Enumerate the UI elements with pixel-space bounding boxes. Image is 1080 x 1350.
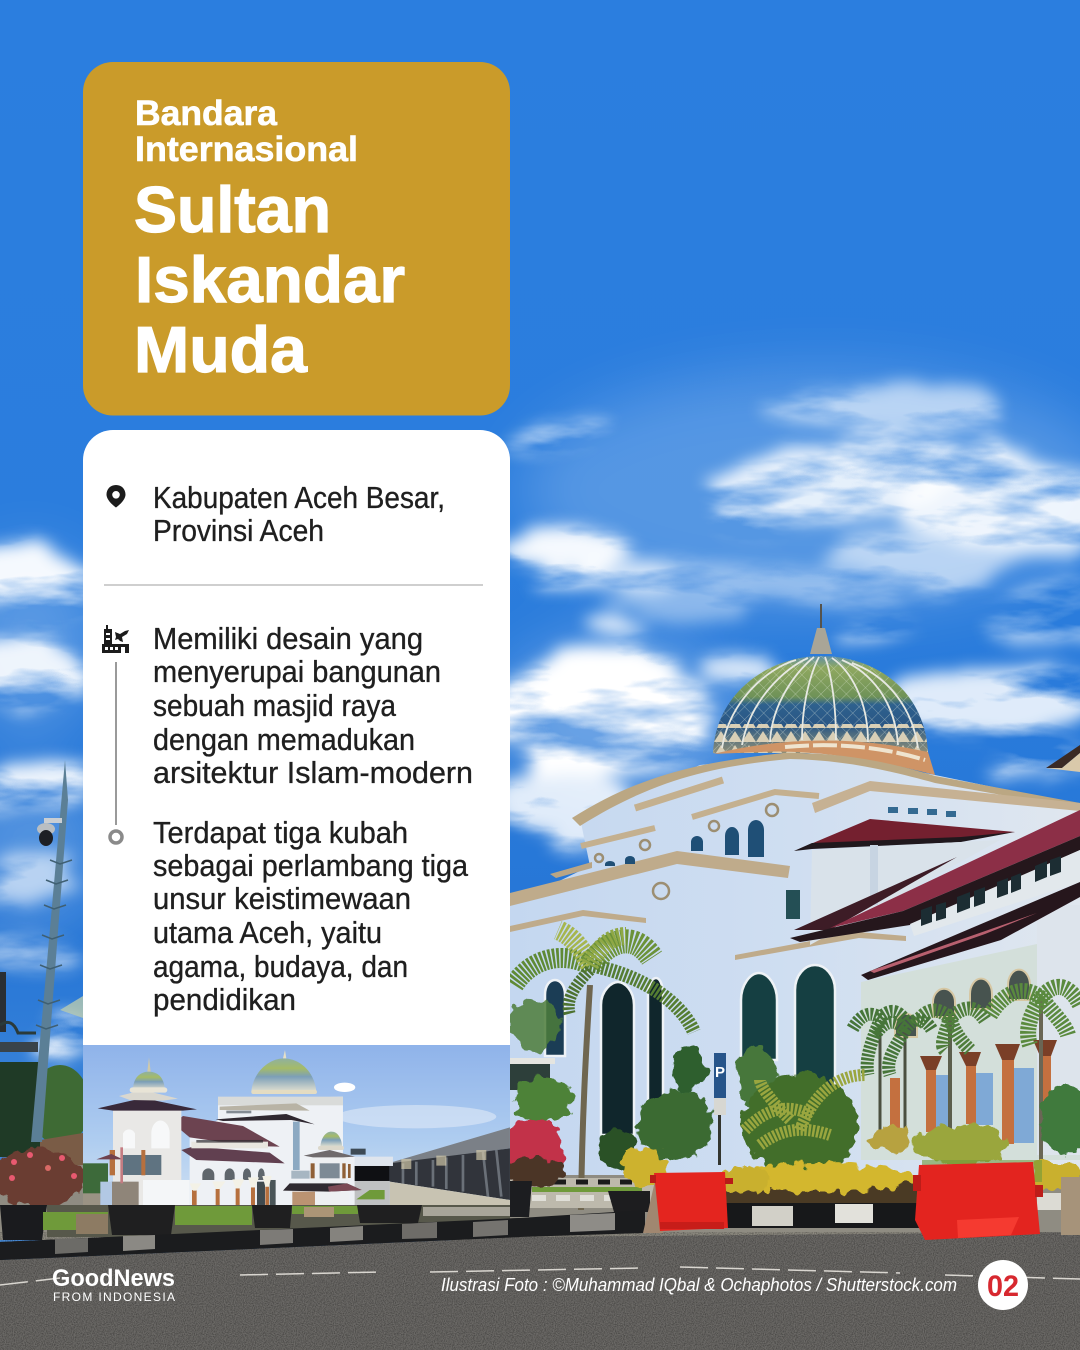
dome [705, 604, 935, 775]
red flower bush [501, 1118, 565, 1182]
text: dome fact [153, 815, 469, 1017]
columns [890, 1040, 1057, 1144]
palms and garden plants [493, 930, 1080, 1217]
text: location: Kabupaten Aceh Besar, [153, 480, 445, 515]
inset clouds [336, 1105, 496, 1128]
page number badge: 02 [987, 1270, 1019, 1303]
main red roof [794, 857, 957, 930]
inset main wall [190, 1097, 355, 1207]
inset large maroon roof [173, 1116, 280, 1147]
text: dome fact: Terdapat tiga kubah [153, 815, 408, 850]
ground behind garden [0, 1160, 1080, 1240]
text: design fact: dengan memadukan [153, 722, 415, 757]
main wall mass [510, 752, 1080, 1175]
logo: GoodNews From Indonesia [52, 1265, 175, 1304]
concrete block [1061, 1177, 1080, 1235]
yellow pot [623, 1148, 667, 1186]
clouds [0, 377, 1080, 1066]
red barrier right [913, 1162, 1043, 1240]
red barrier left [650, 1172, 733, 1231]
inset canopy [283, 1183, 362, 1192]
divider [104, 584, 483, 586]
title: airport name [134, 173, 405, 386]
panel: details card [83, 430, 510, 1046]
large arched windows [545, 965, 835, 1135]
connector node [110, 831, 122, 843]
lower red roof [861, 882, 1080, 980]
terminal building: P [715, 1064, 725, 1081]
main palm [514, 930, 694, 1210]
left flower planter [0, 1148, 84, 1240]
title: small lines: Bandara [135, 94, 278, 133]
top cornice [572, 753, 1080, 826]
text: dome fact: agama, budaya, dan [153, 949, 408, 984]
shrubs [509, 1000, 1080, 1177]
text: dome fact: pendidikan [153, 982, 296, 1017]
inset left tower [113, 1108, 181, 1205]
wing arches [895, 970, 1030, 1037]
text: location: Provinsi Aceh [153, 513, 324, 548]
far right roof corner [1046, 745, 1080, 768]
window strip [910, 850, 1080, 936]
inset trees [83, 1163, 108, 1197]
inset connector [350, 1157, 393, 1166]
inset photo: airport exterior [83, 1045, 510, 1207]
road [0, 1232, 1080, 1350]
inset main dome [251, 1058, 316, 1092]
terminal building [510, 604, 1080, 1175]
curb [0, 1193, 1061, 1260]
left lamp pole and camera [0, 760, 72, 1142]
upper ledges [635, 780, 723, 808]
wall under upper roof [810, 840, 1000, 945]
inset upper roof [216, 1114, 315, 1124]
logo: GoodNews From Indonesia: FROM INDONESIA [53, 1290, 175, 1304]
upper arched windows [605, 820, 800, 919]
text: location [153, 480, 445, 548]
inset arches [202, 1168, 276, 1205]
wing palms [852, 987, 1080, 1164]
title: airport name: Sultan [134, 173, 331, 246]
text: dome fact: utama Aceh, yaitu [153, 915, 382, 950]
inset long corridor [388, 1127, 510, 1164]
left trees and stairs [0, 996, 90, 1165]
page number badge [978, 1260, 1028, 1310]
icon: airport tower and plane [102, 625, 129, 653]
pale lattice wing [861, 930, 1080, 1160]
title: small lines: Internasional [135, 130, 358, 169]
sky haze [0, 370, 1080, 930]
dark left canopy [510, 1058, 555, 1064]
right upper cornice [812, 781, 1080, 813]
panel: title card [83, 62, 510, 416]
text: dome fact: sebagai perlambang tiga [153, 848, 469, 883]
hedge [722, 1180, 922, 1210]
title: small lines [135, 94, 358, 169]
middle cornice [510, 851, 790, 906]
lawn and low kerb [510, 1178, 725, 1208]
upper maroon roof [794, 819, 1015, 851]
photo credit: Ilustrasi Foto : ©Muhammad IQbal & Ochaphotos / Shutterstock.com [441, 1275, 957, 1295]
text: dome fact: unsur keistimewaan [153, 881, 411, 916]
text: design fact: sebuah masjid raya [153, 688, 397, 723]
ornamental stars [595, 804, 778, 899]
traffic cone [643, 1181, 663, 1233]
text: design fact: arsitektur Islam-modern [153, 755, 473, 790]
text: design fact: Memiliki desain yang [153, 621, 423, 656]
text: design fact [153, 621, 473, 790]
blue lower windows [935, 1068, 1034, 1143]
title: airport name: Muda [134, 313, 308, 386]
inset small tower [310, 1157, 350, 1205]
connector line [115, 662, 117, 825]
logo: GoodNews From Indonesia: GoodNews [52, 1265, 175, 1292]
inset foreground planters [0, 1205, 520, 1260]
text: design fact: menyerupai bangunan [153, 654, 441, 689]
title: airport name: Iskandar [135, 243, 405, 316]
parking sign [714, 1053, 726, 1098]
icon: location pin [106, 485, 126, 508]
